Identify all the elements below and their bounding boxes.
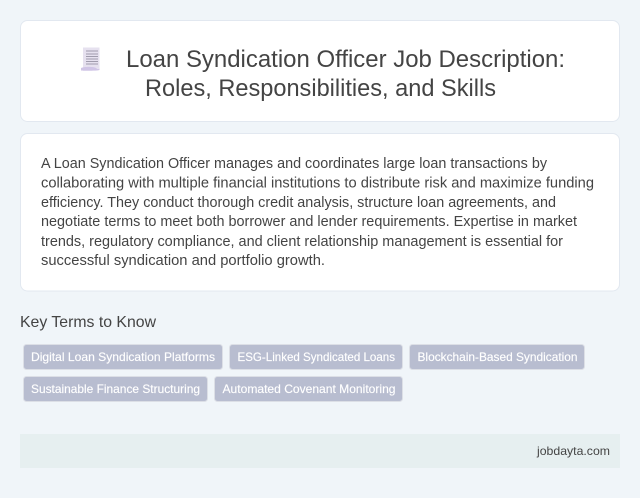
icon: document scroll — [81, 48, 100, 71]
description text: negotiate terms to meet both borrower and lender requirements. Expertise in market — [41, 214, 577, 230]
chip: digital loan syndication platforms: Digital Loan Syndication Platforms — [31, 350, 215, 364]
chip: blockchain-based syndication: Blockchain-Based Syndication — [418, 350, 578, 364]
chip: esg-linked syndicated loans: ESG-Linked Syndicated Loans — [238, 350, 395, 364]
panel: title card — [20, 20, 620, 122]
chip: sustainable finance structuring — [24, 376, 208, 402]
description text: successful syndication and portfolio growth. — [41, 253, 325, 269]
description text — [41, 156, 594, 269]
chip: esg-linked syndicated loans — [230, 344, 402, 370]
title: Loan Syndication Officer Job Description: — [126, 46, 565, 73]
footer bar — [20, 434, 620, 468]
chip: automated covenant monitoring: Automated Covenant Monitoring — [222, 382, 396, 396]
title: Roles, Responsibilities, and Skills — [145, 75, 496, 102]
description text: A Loan Syndication Officer manages and coordinates large loan transactions by — [41, 156, 548, 172]
panel: description card — [20, 134, 620, 291]
heading: key terms: Key Terms to Know — [20, 314, 156, 331]
description text: collaborating with multiple financial institutions to distribute risk and maximize funding — [41, 176, 594, 192]
chip: sustainable finance structuring: Sustainable Finance Structuring — [31, 382, 200, 396]
description text: trends, regulatory compliance, and client relationship management is essential for — [41, 234, 563, 250]
chip: digital loan syndication platforms — [24, 344, 222, 370]
description text: efficiency. They conduct thorough credit analysis, structure loan agreements, and — [41, 195, 556, 211]
chip: automated covenant monitoring — [214, 376, 402, 402]
title — [126, 46, 565, 102]
footer source text: jobdayta.com — [536, 444, 610, 458]
chip: blockchain-based syndication — [410, 344, 584, 370]
